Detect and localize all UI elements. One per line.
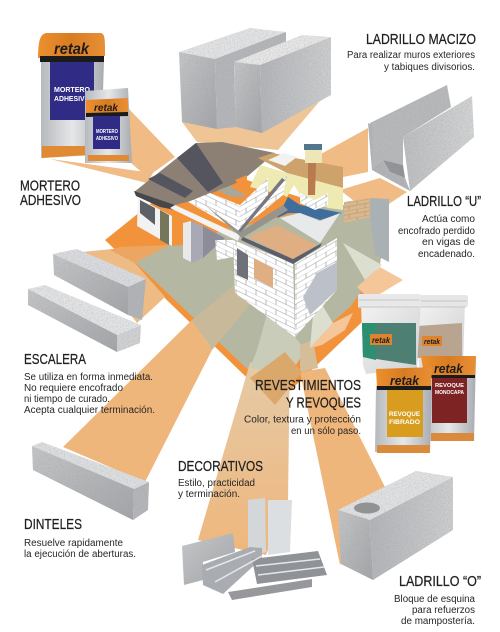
lower block front <box>28 289 117 352</box>
bag title 2: MONOCAPA <box>435 390 464 396</box>
big bag body <box>41 60 104 158</box>
house: roof skylight <box>268 153 297 166</box>
bucket logo: retak <box>372 336 391 345</box>
product: mortero adhesivo bags <box>38 33 132 163</box>
beam: mortero big bag <box>50 159 153 183</box>
house: grey side panel <box>370 198 389 262</box>
description 1: Resuelve rapidamente <box>24 538 123 549</box>
bag logo: retak <box>434 361 464 376</box>
bag title 1: REVOQUE <box>389 412 420 418</box>
block 1 front <box>179 52 217 129</box>
heading: DECORATIVOS <box>178 458 263 475</box>
lower strip <box>228 579 312 600</box>
bag title 2: FIBRADO <box>389 420 420 426</box>
beam: dinteles over ground <box>192 282 262 350</box>
house: grey floor line <box>205 205 288 238</box>
bag yellow label <box>387 390 423 437</box>
beams connecting products to the house <box>50 95 407 565</box>
bag strip <box>424 375 475 378</box>
lower block end <box>117 325 141 352</box>
monocapa bag <box>421 356 476 441</box>
house: tan bricks right <box>344 198 370 223</box>
house: roof dark band 2 <box>148 173 193 198</box>
big bag orange top <box>38 33 105 58</box>
heading line 1: REVESTIMIENTOS <box>255 377 361 394</box>
hole <box>354 502 380 514</box>
text: ladrillo macizo <box>347 31 476 73</box>
dintel end <box>133 482 149 520</box>
beam: mortero small bag <box>128 108 175 177</box>
bucket green strip <box>362 323 376 360</box>
description 1: Actúa como <box>422 214 475 225</box>
heading: mortero adhesivo <box>20 178 81 209</box>
beam: left light tan <box>110 245 170 263</box>
product: ladrillo macizo blocks <box>179 28 331 133</box>
house: olive door <box>160 210 169 245</box>
description 1: Se utiliza en forma inmediata. <box>24 372 153 383</box>
small bag bottom <box>88 155 129 161</box>
beam: decorativos light top <box>250 267 305 375</box>
house: front wall right <box>295 238 337 337</box>
house: orange floor <box>172 218 183 246</box>
description 4: Acepta cualquier terminación. <box>24 405 155 416</box>
house: interior pillar light <box>183 221 191 262</box>
text: revestimientos y revoques <box>244 377 361 437</box>
heading line 2: Y REVOQUES <box>286 394 361 412</box>
front wall <box>403 96 474 191</box>
beam: revestimientos light triangle upper <box>343 243 382 280</box>
small bag strip <box>86 112 128 117</box>
bucket body <box>361 302 421 374</box>
house: cream area right <box>287 173 343 210</box>
description 2: encofrado perdido <box>398 226 475 237</box>
beam: ladrillo O top <box>300 340 318 372</box>
description 1: Bloque de esquina <box>394 594 475 605</box>
bucket label <box>417 323 462 358</box>
product: ladrillo O <box>338 471 453 580</box>
house: pale floor <box>280 213 340 243</box>
house: dark window front <box>237 248 248 280</box>
upper block top <box>53 249 146 287</box>
description 3: en vigas de <box>422 237 475 248</box>
description 2: para refuerzos <box>412 605 475 616</box>
description 2: en un sólo paso. <box>291 426 361 437</box>
small bag body <box>85 88 132 163</box>
house: blue floor <box>277 197 342 220</box>
description 1: Para realizar muros exteriores <box>347 50 475 61</box>
fibrado bag <box>375 367 432 453</box>
big bag <box>38 33 105 158</box>
chimney top <box>305 150 322 163</box>
description 2: y terminación. <box>178 489 240 500</box>
beam: ladrillo U lower <box>340 178 407 215</box>
dintel front <box>32 446 134 520</box>
block 2 front <box>234 62 262 133</box>
small bag subtitle: ADHESIVO <box>96 136 118 142</box>
beam: revestimientos tan <box>310 313 353 348</box>
house: roof slab edge <box>241 237 322 264</box>
description 3: de mampostería. <box>401 616 475 627</box>
heading line 1: MORTERO <box>20 178 80 194</box>
heading: DINTELES <box>24 516 82 533</box>
house: chimney <box>300 144 328 210</box>
bucket logo plate <box>370 334 392 345</box>
chimney shaft <box>308 162 316 195</box>
house: white beam <box>170 205 240 241</box>
product: ladrillo U <box>368 85 474 191</box>
heading: LADRILLO “O” <box>399 573 481 590</box>
big bag logo: retak <box>54 41 90 58</box>
front <box>338 510 373 580</box>
bag orange top <box>376 367 432 387</box>
description 2: la ejecución de aberturas. <box>24 549 136 560</box>
vertical panel right <box>268 500 292 555</box>
house: dark window <box>140 200 155 225</box>
left end <box>368 123 410 191</box>
sage ground <box>135 205 388 383</box>
beam: top right tan <box>357 267 403 300</box>
bucket lid <box>358 294 421 308</box>
beam: ladrillo U upper <box>310 128 368 177</box>
small bag logo: retak <box>94 102 119 114</box>
house: orange gap <box>235 175 247 195</box>
upper block front <box>53 254 128 315</box>
description 1: Estilo, practicidad <box>178 478 255 489</box>
bucket logo plate <box>422 336 442 346</box>
bag orange top <box>421 356 476 376</box>
large moulding <box>202 547 262 594</box>
block 1 side <box>215 32 286 129</box>
house: cream area left <box>250 165 297 197</box>
small bag orange top <box>86 98 128 115</box>
channel floor <box>383 160 405 178</box>
top <box>338 471 453 520</box>
beam: decorativos <box>198 347 290 555</box>
small bag <box>85 88 132 163</box>
dintel top <box>32 442 149 489</box>
beam: escalera <box>82 249 165 323</box>
house: interior shadow <box>203 226 225 258</box>
bag body <box>375 386 432 453</box>
house: tan terrace <box>248 225 317 259</box>
bucket label <box>362 323 416 365</box>
back wall <box>370 85 451 167</box>
description 3: ni tiempo de curado. <box>24 394 110 405</box>
chimney cap <box>304 144 322 150</box>
product: revoques and buckets <box>358 294 476 453</box>
house: roof dark band 1 <box>177 143 223 192</box>
text: decorativos <box>178 458 263 500</box>
beam: dinteles <box>63 320 212 482</box>
bucket rim line <box>359 300 420 307</box>
text: ladrillo O <box>394 573 481 627</box>
house: brick wall right <box>240 178 268 227</box>
bag bottom <box>431 433 474 441</box>
house: front wall left <box>233 240 295 337</box>
big bag subtitle: ADHESIVO <box>54 94 90 103</box>
small bag blue label <box>93 116 120 149</box>
text: escalera <box>24 351 155 416</box>
small bag title: MORTERO <box>96 129 118 135</box>
bag strip <box>377 386 431 390</box>
house: tan attic <box>258 153 343 188</box>
description 4: encadenado. <box>418 249 475 260</box>
heading: ESCALERA <box>24 351 86 368</box>
description 2: No requiere encofrado <box>24 383 123 394</box>
house: stairs <box>215 240 233 260</box>
house illustration <box>134 142 389 337</box>
block 1 top <box>179 28 286 59</box>
beam: revestimientos light triangle <box>310 293 333 348</box>
lower block top <box>28 285 141 335</box>
beam: ladrillo macizo <box>182 95 325 150</box>
house: wall shade <box>303 262 337 315</box>
text: dinteles <box>24 516 136 560</box>
big bag orange bottom <box>42 146 88 158</box>
house: roof edge <box>134 191 180 211</box>
block 2 side <box>260 37 331 133</box>
big bag title: MORTERO <box>54 85 90 94</box>
product: dintel <box>32 442 149 520</box>
stepped moulding <box>252 551 327 584</box>
upper block end <box>128 279 146 320</box>
description 1: Color, textura y protección <box>244 414 361 426</box>
beam: ladrillo O <box>300 368 385 565</box>
house: brick wall left <box>188 193 240 232</box>
beam: bottom tan corner <box>250 352 302 405</box>
heading line 2: ADHESIVO <box>20 192 81 209</box>
text: ladrillo U <box>398 193 481 260</box>
heading: LADRILLO MACIZO <box>366 31 476 48</box>
block 2 top <box>234 35 331 65</box>
bag body <box>421 356 476 441</box>
description 2: y tabiques divisorios. <box>384 62 475 73</box>
bucket body <box>417 302 465 367</box>
bag red label <box>432 378 467 423</box>
product: decorative mouldings <box>182 498 327 600</box>
green bucket <box>358 294 421 374</box>
house: tan opening <box>254 258 273 288</box>
bag title 1: REVOQUE <box>435 383 465 389</box>
house: interior pillar grey <box>191 221 203 263</box>
bag bottom <box>377 445 430 453</box>
house: roof <box>134 142 275 205</box>
flat panel <box>182 533 235 585</box>
bucket logo: retak <box>424 337 441 346</box>
product: escalera blocks <box>28 249 146 352</box>
house: grey roof slab <box>218 186 247 197</box>
moulding highlights <box>206 551 324 582</box>
bucket lid <box>416 295 468 307</box>
house: diagonal beam <box>237 178 285 232</box>
house: brick wall back <box>240 175 287 230</box>
chimney base <box>300 193 328 210</box>
big bag blue label <box>50 62 94 120</box>
bucket rim line <box>417 301 467 307</box>
side <box>370 477 453 580</box>
orange diamond ground <box>105 165 375 405</box>
beige bucket <box>416 295 468 367</box>
vertical panel left <box>248 498 266 557</box>
big bag strip <box>40 56 104 62</box>
house: left wall <box>137 198 172 246</box>
bag logo: retak <box>390 373 420 388</box>
